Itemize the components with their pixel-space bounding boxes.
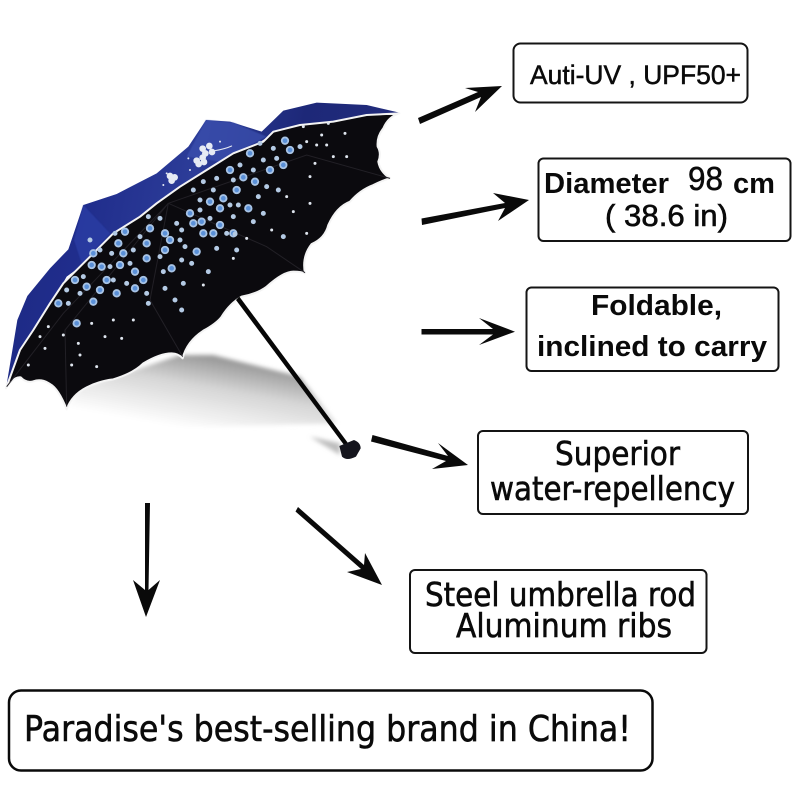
callout: diameter: cm xyxy=(733,168,775,200)
arrow: to foldable box xyxy=(422,318,515,345)
callout: diameter: 98 xyxy=(688,160,723,197)
large flower petals xyxy=(58,141,290,323)
arrow: to steel rod box xyxy=(296,507,382,585)
canopy underside xyxy=(6,113,399,409)
handle shadow xyxy=(310,437,340,455)
callout: anti-UV xyxy=(514,44,748,102)
callout: steel rod and ribs: Steel umbrella rod xyxy=(425,575,696,614)
callout: foldable: Foldable, xyxy=(591,290,722,322)
flower centres xyxy=(58,141,290,323)
arrow: to UV box xyxy=(418,86,502,124)
callout: water repellency xyxy=(478,431,748,514)
canopy fold shadow xyxy=(74,205,110,263)
small pale flowers xyxy=(67,143,300,310)
illustration: umbrella xyxy=(6,103,399,459)
callout: best-selling brand: Paradise's best-selling brand in China! xyxy=(24,709,631,750)
ribs xyxy=(7,155,390,407)
callout: water repellency: Superior xyxy=(555,434,680,473)
flowers on outer fabric xyxy=(163,142,232,185)
callout: foldable xyxy=(526,288,778,371)
callout: diameter: ( 38.6 in) xyxy=(605,198,728,233)
ground shadow xyxy=(68,355,337,427)
callout: diameter: Diameter xyxy=(544,168,669,200)
callout: foldable: inclined to carry xyxy=(537,331,767,363)
arrow: to brand box xyxy=(133,503,160,617)
shaft xyxy=(236,297,348,445)
arrow: to diameter box xyxy=(422,193,529,225)
callout: best-selling brand xyxy=(9,690,652,770)
callout: steel rod and ribs xyxy=(410,570,706,653)
callout: diameter xyxy=(538,158,790,241)
scattered white dots xyxy=(28,123,347,367)
callout: water repellency: water-repellency xyxy=(490,469,735,508)
handle xyxy=(339,440,361,459)
canopy highlights xyxy=(187,120,267,162)
arrow: to water-repellency box xyxy=(371,435,468,469)
canopy outer blue fabric xyxy=(6,103,399,388)
callout: steel rod and ribs: Aluminum ribs xyxy=(456,606,672,645)
callout: anti-UV: Auti-UV , UPF50+ xyxy=(530,60,741,90)
